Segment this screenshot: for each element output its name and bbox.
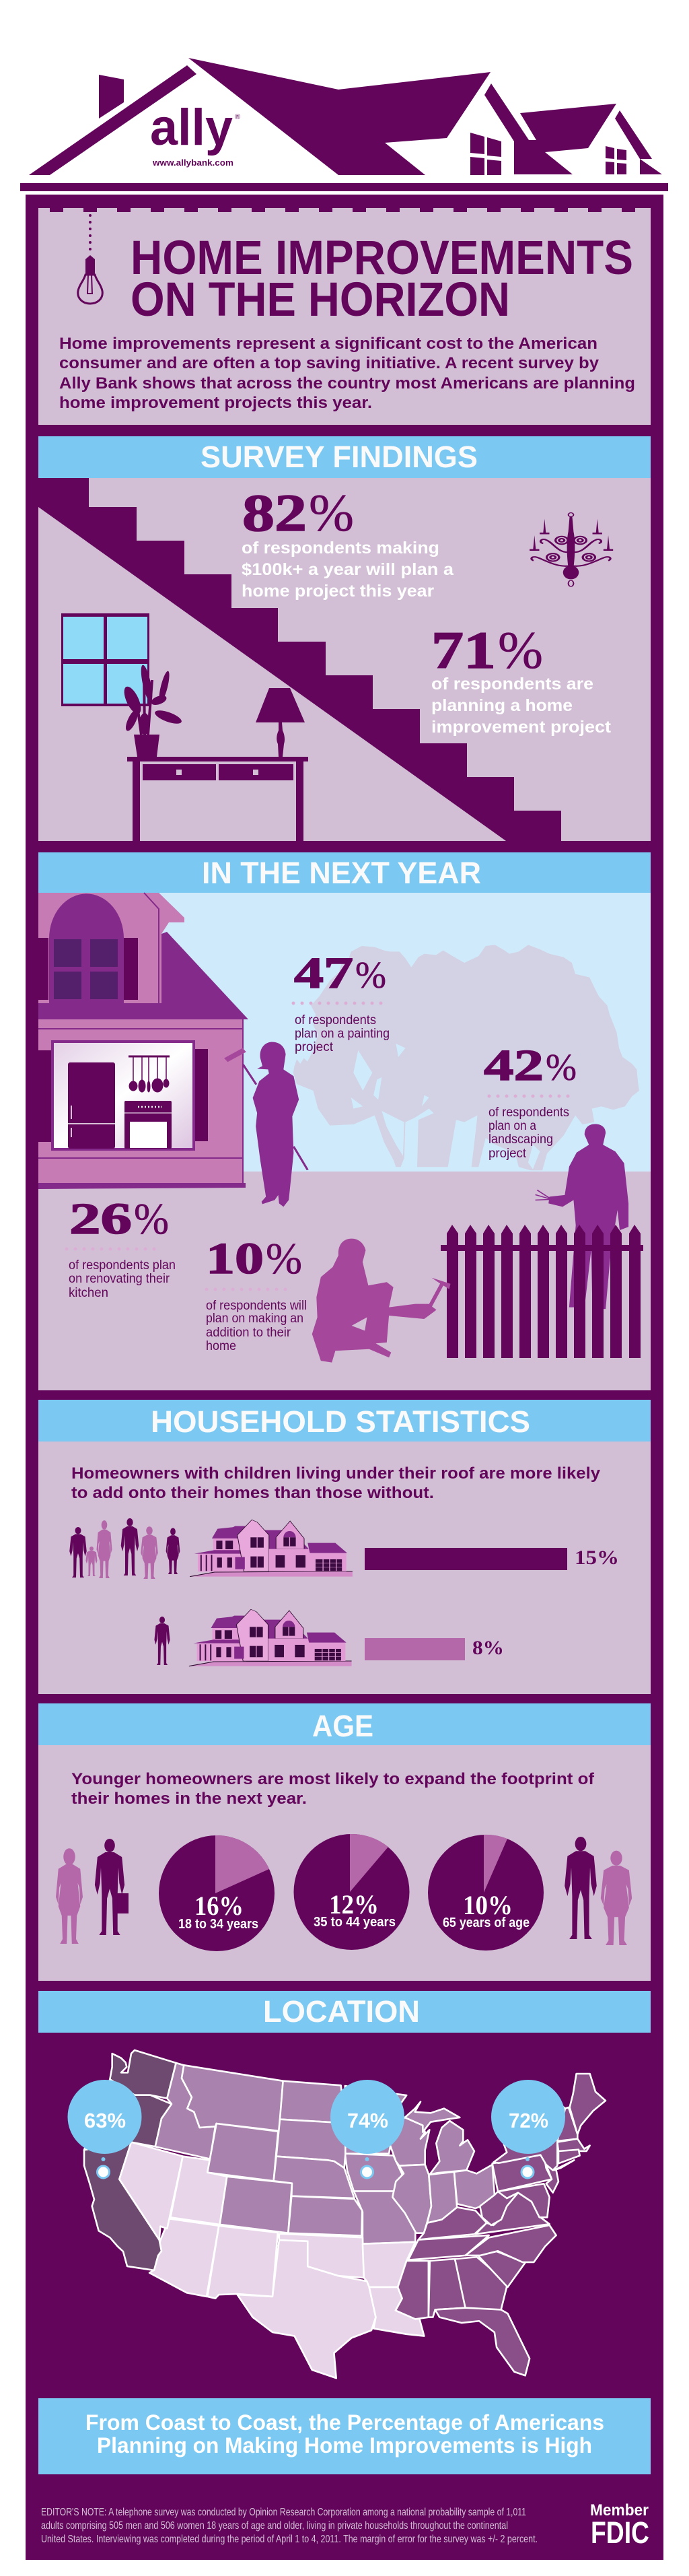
bubble: east 72 percent	[491, 2080, 565, 2178]
bubble: midwest 74 percent: 74%	[347, 2109, 388, 2132]
heading bar: HOUSEHOLD STATISTICS	[151, 1404, 530, 1439]
82 percent stat: $100k+ a year will plan a	[242, 560, 454, 579]
71 percent stat: of respondents are	[431, 675, 593, 693]
26 percent stat: of respondents plan	[69, 1258, 176, 1273]
pie: 65 years of age	[428, 1835, 544, 1951]
10 percent stat: addition to their	[206, 1326, 291, 1340]
bubble: east 72 percent: 72%	[509, 2109, 548, 2132]
82 percent stat	[242, 483, 454, 601]
house illustration: single	[189, 1609, 352, 1666]
house with kitchen	[38, 893, 248, 1189]
heading bar	[38, 1703, 651, 1745]
ally logo: ally	[150, 99, 233, 156]
42 percent stat: 42	[484, 1041, 544, 1090]
window	[61, 613, 149, 706]
potted plant	[121, 664, 183, 757]
47 percent stat: 47	[294, 949, 353, 998]
conclusion banner	[38, 2398, 651, 2474]
ally logo: ®	[235, 113, 240, 121]
10 percent stat: home	[206, 1339, 236, 1353]
icon: light bulb	[78, 215, 102, 304]
age text	[71, 1770, 595, 1808]
71 percent stat: improvement project	[431, 718, 612, 737]
10 percent stat: of respondents will	[206, 1299, 307, 1313]
house illustration: family	[190, 1520, 353, 1577]
heading bar	[38, 852, 651, 893]
US map	[84, 2050, 606, 2378]
household text: Homeowners with children living under their roof are more likely	[71, 1464, 601, 1483]
42 percent stat: %	[546, 1047, 577, 1089]
pie: 65 years of age: 10%	[463, 1890, 513, 1920]
47 percent stat	[293, 949, 390, 1054]
42 percent stat: of respondents	[488, 1106, 569, 1120]
title	[131, 232, 633, 327]
trees	[293, 945, 639, 1170]
ground	[38, 1172, 651, 1390]
intro text: consumer and are often a top saving initiative. A recent survey by	[59, 354, 600, 372]
42 percent stat: landscaping	[488, 1132, 553, 1147]
staircase	[38, 478, 561, 841]
editor's note: United States. Interviewing was completed during the period of April 1 to 4, 2011. The margin of error for the survey was +/- 2 percent.	[41, 2534, 538, 2545]
heading bar	[38, 1991, 651, 2033]
10 percent stat: %	[266, 1234, 302, 1283]
pie: 35 to 44 years: 35 to 44 years	[314, 1915, 396, 1930]
painter silhouette	[226, 1042, 307, 1207]
editor's note: EDITOR'S NOTE: A telephone survey was conducted by Opinion Research Corporation among a national probability sample of 1,011	[41, 2507, 526, 2518]
26 percent stat: kitchen	[69, 1286, 108, 1300]
82 percent stat: %	[309, 483, 354, 542]
71 percent stat	[431, 621, 612, 737]
26 percent stat	[67, 1194, 176, 1300]
82 percent stat: of respondents making	[242, 539, 439, 557]
42 percent stat: project	[488, 1147, 527, 1161]
10 percent stat: 10	[206, 1234, 264, 1283]
bar: without children 8 percent: 8%	[472, 1637, 504, 1659]
pie: 18 to 34 years: 16%	[194, 1891, 244, 1921]
family silhouettes	[69, 1518, 180, 1579]
stove	[124, 1101, 172, 1149]
gardener silhouette	[536, 1124, 628, 1309]
editor's note: adults comprising 505 men and 506 women 18 years of age and older, living in private households throughout the continental	[41, 2520, 508, 2532]
bar: with children 15 percent: 15%	[575, 1547, 619, 1569]
Member FDIC logo	[590, 2501, 649, 2550]
26 percent stat: %	[134, 1194, 169, 1244]
age text: Younger homeowners are most likely to expand the footprint of	[71, 1770, 595, 1788]
71 percent stat: planning a home	[431, 696, 573, 715]
pie: 35 to 44 years	[293, 1834, 409, 1950]
bubble: west 63 percent	[67, 2080, 141, 2178]
eave bar	[20, 183, 668, 191]
woman silhouette left	[56, 1848, 83, 1944]
pie: 18 to 34 years	[159, 1835, 275, 1951]
10 percent stat	[206, 1234, 307, 1353]
single person silhouette	[154, 1617, 170, 1665]
roof illustration	[29, 58, 662, 175]
panel: age	[38, 1703, 651, 1981]
heading bar	[38, 436, 651, 478]
age text: their homes in the next year.	[71, 1790, 307, 1808]
intro text	[59, 335, 635, 412]
editor's note	[41, 2507, 538, 2545]
ally logo: www.allybank.com	[152, 158, 233, 168]
picket fence	[441, 1225, 643, 1358]
bubble: west 63 percent: 63%	[84, 2109, 126, 2132]
panel: household statistics	[38, 1400, 651, 1694]
title: ON THE HORIZON	[131, 273, 510, 327]
10 percent stat: plan on making an	[206, 1312, 303, 1326]
panel: survey findings	[38, 436, 651, 841]
conclusion banner: From Coast to Coast, the Percentage of Americans	[85, 2410, 604, 2435]
71 percent stat: 71	[431, 621, 496, 679]
pie: 35 to 44 years: 12%	[329, 1889, 379, 1920]
26 percent stat: on renovating their	[69, 1272, 170, 1286]
Member FDIC logo: FDIC	[591, 2515, 649, 2550]
household text	[71, 1464, 601, 1502]
household text: to add onto their homes than those without.	[71, 1484, 434, 1502]
sky	[38, 893, 651, 1172]
intro text: Ally Bank shows that across the country most Americans are planning	[59, 374, 635, 393]
man with briefcase silhouette	[95, 1839, 129, 1935]
title: HOME IMPROVEMENTS	[131, 232, 633, 285]
47 percent stat: %	[355, 955, 386, 996]
heading bar: SURVEY FINDINGS	[201, 440, 478, 474]
panel: location	[38, 1991, 651, 2550]
heading bar: LOCATION	[263, 1994, 420, 2029]
kneeling carpenter silhouette	[312, 1239, 451, 1363]
console table	[127, 757, 308, 841]
42 percent stat	[484, 1041, 577, 1161]
bar: with children 15 percent	[365, 1547, 619, 1570]
42 percent stat: plan on a	[488, 1119, 536, 1133]
intro text: home improvement projects this year.	[59, 394, 372, 412]
pie: 65 years of age: 65 years of age	[443, 1916, 530, 1930]
panel: intro	[38, 208, 651, 425]
panel: in the next year	[38, 852, 651, 1390]
intro text: Home improvements represent a significant cost to the American	[59, 335, 597, 353]
Member FDIC logo: Member	[590, 2501, 649, 2519]
hanging utensils	[129, 1056, 170, 1092]
47 percent stat: project	[295, 1040, 334, 1054]
woman silhouette right	[601, 1851, 632, 1945]
heading bar: AGE	[312, 1709, 373, 1743]
conclusion banner: Planning on Making Home Improvements is High	[97, 2433, 592, 2458]
bubble: midwest 74 percent	[330, 2080, 404, 2178]
26 percent stat: 26	[69, 1194, 132, 1244]
pie: 18 to 34 years: 18 to 34 years	[178, 1917, 258, 1932]
heading bar: IN THE NEXT YEAR	[202, 856, 481, 890]
82 percent stat: home project this year	[242, 582, 434, 601]
heading bar	[38, 1400, 651, 1442]
man silhouette right	[565, 1837, 597, 1939]
bar: without children 8 percent	[365, 1637, 504, 1660]
47 percent stat: of respondents	[295, 1013, 376, 1027]
table lamp	[256, 688, 305, 757]
47 percent stat: plan on a painting	[295, 1027, 390, 1041]
82 percent stat: 82	[242, 483, 307, 542]
fridge	[68, 1062, 115, 1149]
icon: chandelier	[530, 513, 613, 586]
71 percent stat: %	[498, 621, 543, 679]
